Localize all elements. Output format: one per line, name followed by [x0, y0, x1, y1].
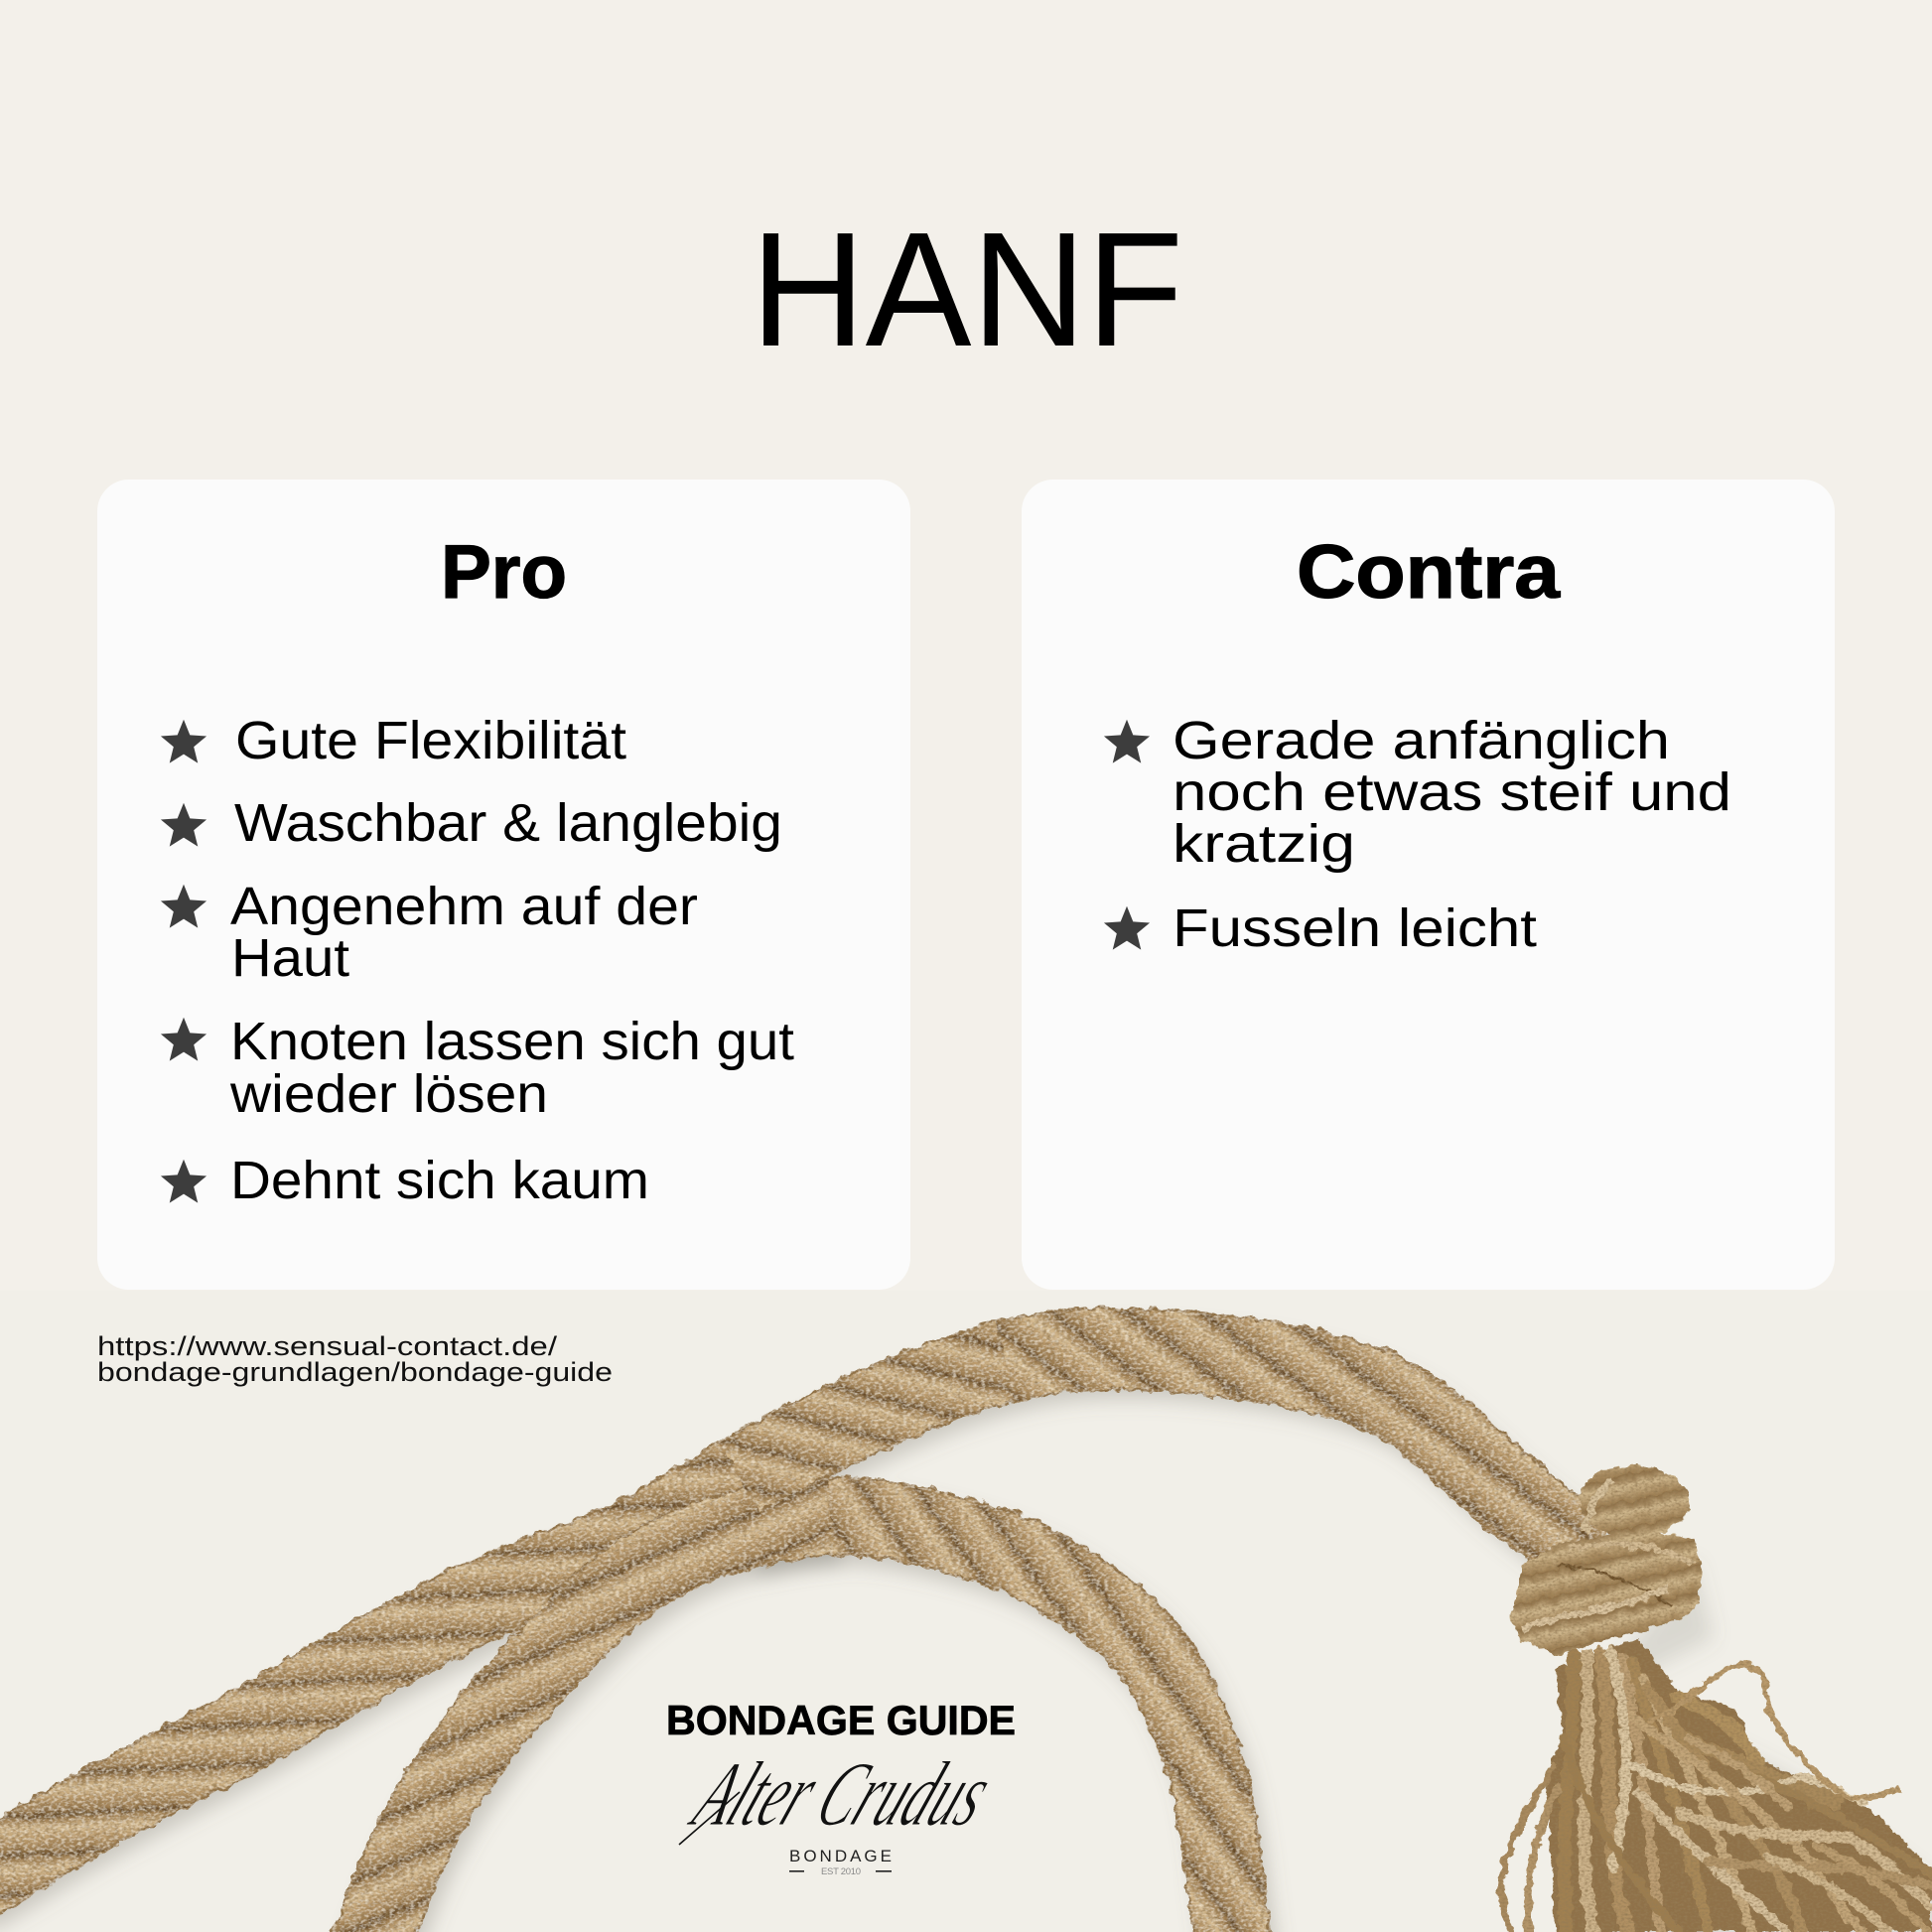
item: lint: Fusseln leicht: [1173, 898, 1537, 958]
rope right leg: [742, 1515, 1235, 1932]
knot top lobe: [1579, 1465, 1690, 1537]
icons: stars: [161, 720, 207, 1203]
item: stretch: Dehnt sich kaum: [230, 1151, 649, 1210]
logo heading: BONDAGE GUIDE: [666, 1697, 1016, 1743]
signature: Alter Crudus: [676, 1743, 1007, 1846]
heading: pro: Pro: [441, 530, 567, 615]
list: contra items: [1173, 711, 1731, 958]
item: knots line 2: wieder lösen: [229, 1064, 548, 1124]
logo subtitle: BONDAGE: [789, 1847, 892, 1865]
loose strand: [1651, 1665, 1898, 1798]
footer logo: [666, 1697, 1016, 1877]
item: washable: Waschbar & langlebig: [234, 793, 782, 853]
rope main upper arc: [740, 1349, 1589, 1555]
icons: stars: [1104, 720, 1150, 950]
tassel strands: [1501, 1653, 1932, 1932]
logo year: EST 2010: [821, 1866, 861, 1877]
source url: [97, 1331, 613, 1387]
knot and tassel: [1501, 1465, 1932, 1932]
panel: pro: [97, 480, 910, 1290]
card background: [97, 480, 910, 1290]
source url: https://www.sensual-contact.de/: [97, 1331, 558, 1361]
item: knots: Knoten lassen sich gut: [230, 1012, 794, 1071]
item: stiff line 2: noch etwas steif und: [1173, 762, 1731, 822]
panel: contra: [1022, 480, 1835, 1290]
tassel body: [1546, 1638, 1932, 1932]
item: stiff line 3: kratzig: [1173, 814, 1355, 874]
rope main left section: [0, 1477, 740, 1887]
item: pleasant on skin: Angenehm auf der: [230, 877, 698, 936]
card background: [1022, 480, 1835, 1290]
rope illustration: [0, 1349, 1932, 1932]
item: pleasant on skin line 2: Haut: [231, 928, 349, 988]
heading: contra: Contra: [1297, 530, 1561, 615]
knot seams: [1524, 1479, 1693, 1628]
knot body: [1509, 1529, 1703, 1655]
list: pro items: [229, 711, 794, 1210]
rope left leg: [364, 1516, 831, 1932]
source url: bondage-grundlagen/bondage-guide: [97, 1357, 613, 1387]
knot shadow: [1594, 1559, 1932, 1932]
signature flourish: [679, 1792, 740, 1845]
logo dashes: [789, 1870, 892, 1872]
item: stiff: Gerade anfänglich: [1173, 711, 1670, 770]
title: HANF: [751, 199, 1183, 380]
item: flexibility: Gute Flexibilität: [235, 711, 626, 770]
rope shadow: [0, 1362, 1598, 1932]
